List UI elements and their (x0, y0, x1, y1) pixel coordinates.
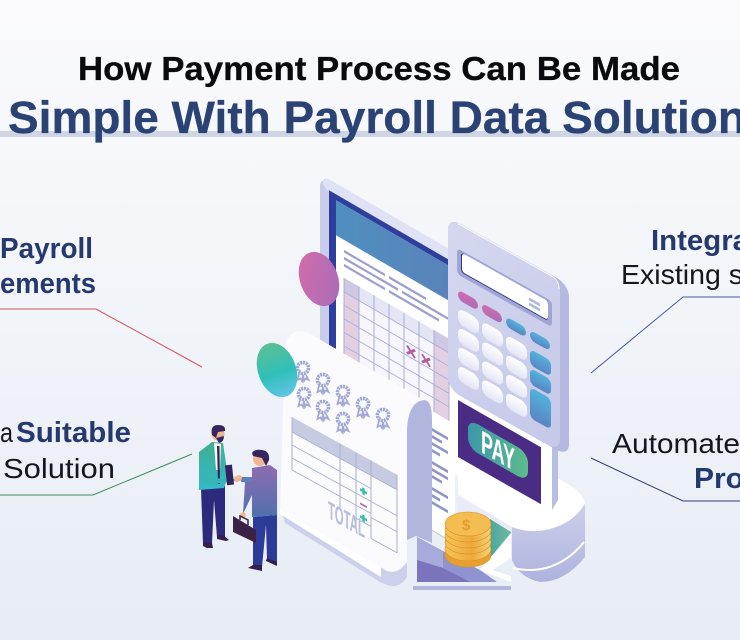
title: How Payment Process Can Be Made (78, 51, 680, 88)
receipt table (292, 417, 397, 553)
pink circle badge (292, 246, 346, 312)
title (8, 51, 740, 143)
callout: suitable solution: Solution (3, 453, 115, 484)
plus and minus marks (360, 486, 367, 524)
receipt paper (280, 331, 432, 572)
title underline band (0, 131, 740, 137)
calculator (448, 217, 569, 457)
pay button: PAY (481, 424, 515, 479)
calculator screen (457, 248, 552, 327)
coin stack (445, 512, 491, 567)
calculator keys (458, 290, 551, 433)
person: businessman right (236, 450, 277, 571)
callout: automate process: Automate (612, 428, 740, 459)
receipt curl (407, 400, 432, 543)
teal circle badge (250, 337, 304, 403)
briefcase (233, 516, 256, 543)
payment tray (413, 533, 511, 590)
monitor header band (336, 200, 455, 304)
illustration (199, 174, 585, 590)
callout: suitable solution: Suitable (16, 417, 131, 449)
callout: integrate existing systems: Existing s (621, 259, 740, 290)
coin stack: $ (462, 517, 471, 534)
award medals (297, 362, 389, 432)
slip stripes (432, 428, 448, 513)
pay display (458, 400, 541, 504)
payment slot (490, 519, 511, 560)
callout: automate process (591, 428, 740, 501)
schedule grid (344, 278, 449, 421)
callout: integrate existing systems (591, 225, 740, 373)
callout: suitable solution: a (0, 417, 13, 448)
person: businessman left (199, 425, 240, 548)
document text lines (344, 250, 448, 327)
callout: payroll requirements: Payroll (0, 233, 93, 265)
cross marks (407, 345, 430, 367)
base platform (458, 450, 585, 582)
monitor (320, 174, 455, 544)
title: Simple With Payroll Data Solution (8, 92, 740, 143)
callout: payroll requirements: ements (0, 268, 96, 300)
callout: suitable solution (0, 417, 192, 495)
receipt bottom fold (280, 508, 407, 586)
calculator stand (448, 380, 558, 510)
callout: payroll requirements (0, 233, 202, 367)
receipt: TOTAL (328, 496, 365, 544)
receipt (280, 331, 432, 586)
